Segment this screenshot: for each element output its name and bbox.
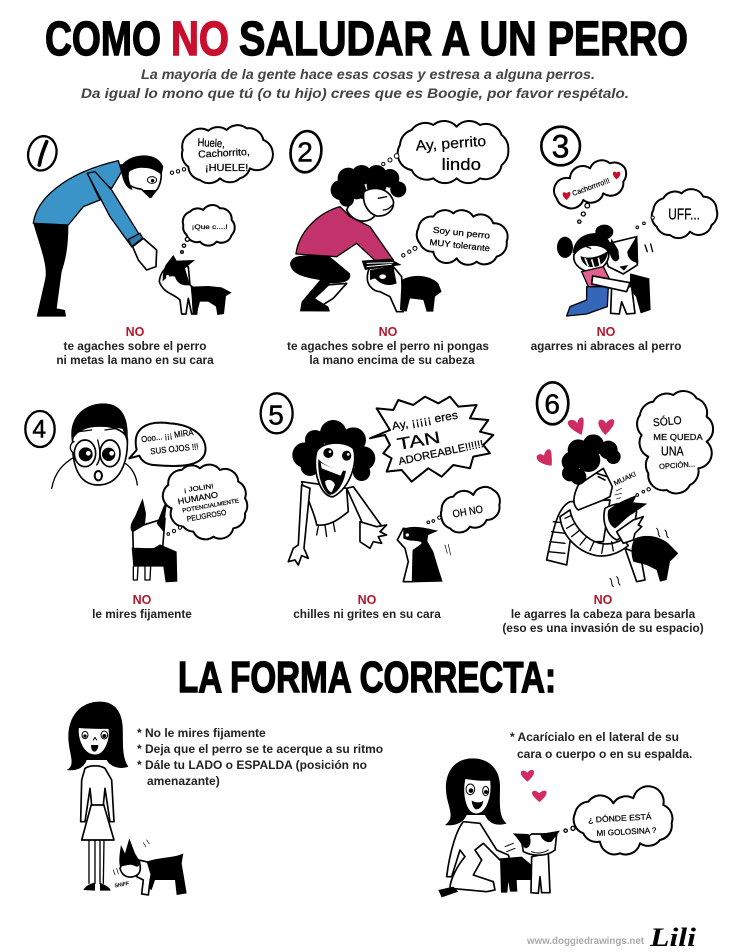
dog's thought cloud <box>402 210 508 265</box>
dog's thought cloud: ¡ JOLIN! <box>183 483 214 494</box>
kneeling woman <box>438 758 510 897</box>
dog's UFF cloud <box>636 189 717 252</box>
dog's thought cloud: ME QUEDA <box>653 432 703 442</box>
number 4 <box>25 411 55 447</box>
woman's thought cloud <box>382 121 508 183</box>
caption 4: NO <box>133 593 152 607</box>
dog's OH NO cloud: OH NO <box>452 503 484 521</box>
list: second tip: * Acarícialo en el lateral de su <box>510 730 679 744</box>
caption 3 <box>531 325 681 353</box>
dog's thought cloud: MI GOLOSINA ? <box>596 826 657 838</box>
number 4: 4 <box>32 417 46 444</box>
caption 1: te agaches sobre el perro <box>64 339 206 353</box>
dog's thought cloud: SÓLO <box>652 414 682 429</box>
panel: 2 hand on the head <box>288 121 508 312</box>
list: first tips: * Deja que el perro se te acerque a su ritmo <box>137 742 383 756</box>
caption 2: la mano encima de su cabeza <box>309 353 475 367</box>
dog being petted <box>500 831 560 893</box>
caption 4 <box>92 593 192 621</box>
number 6: 6 <box>544 388 560 419</box>
caption 2: te agaches sobre el perro ni pongas <box>287 339 489 353</box>
dog's UFF cloud: UFF... <box>668 206 700 223</box>
caption 2: NO <box>379 325 398 339</box>
shouting woman <box>288 420 383 565</box>
caption 1: ni metas la mano en su cara <box>56 353 214 367</box>
subtitle: Da igual lo mono que tú (o tu hijo) crees que es Boogie, por favor respétalo. <box>81 86 629 101</box>
caption 1 <box>56 325 214 367</box>
dog's thought cloud <box>163 465 247 539</box>
list: first tips: * No le mires fijamente <box>137 726 266 740</box>
man's thought cloud: ¡HUELE! <box>205 163 248 174</box>
standing woman <box>67 702 128 891</box>
sniffing dog <box>113 838 187 895</box>
number 5 <box>261 393 293 433</box>
dog's thought cloud <box>181 205 235 253</box>
list: first tips: * Dále tu LADO o ESPALDA (posición no <box>137 758 367 772</box>
caption 2 <box>287 325 489 367</box>
subtitle <box>81 67 629 101</box>
title <box>45 13 688 66</box>
staring man <box>52 403 137 488</box>
panel: 1 leaning over the dog <box>24 125 273 317</box>
caption 4: le mires fijamente <box>92 607 192 621</box>
number 6 <box>537 382 568 424</box>
caption 6: NO <box>594 593 613 607</box>
number 2 <box>288 129 324 174</box>
man <box>33 155 163 317</box>
woman's shout bubble: Ay, ¡¡¡¡¡ eres <box>391 409 459 433</box>
kissing woman: MUAK! <box>613 471 638 487</box>
dog's thought cloud: PELIGROSO <box>186 508 227 524</box>
caption 6 <box>502 593 704 635</box>
panel: 3 hugging <box>541 127 717 316</box>
sitting dog <box>397 527 451 582</box>
sniffing dog: SNIFF <box>114 881 130 889</box>
caption 1: NO <box>126 325 145 339</box>
man's thought cloud: Cachorrito, <box>198 147 250 161</box>
dog's thought cloud <box>636 391 713 496</box>
dog's thought cloud: POTENCIALMENTE <box>182 498 240 514</box>
woman's thought cloud: lindo <box>442 155 481 174</box>
caption 3: NO <box>597 325 616 339</box>
dog's thought cloud: OPCIÓN... <box>659 459 695 471</box>
dog being kissed <box>604 495 678 587</box>
man's thought cloud <box>170 125 273 183</box>
caption 6: (eso es una invasión de su espacio) <box>502 621 704 635</box>
panel: correct way, standing woman and dog <box>67 702 187 895</box>
number 5: 5 <box>268 399 284 430</box>
list: first tips: amenazante) <box>147 774 220 788</box>
caption 3: agarres ni abraces al perro <box>531 339 681 353</box>
subtitle: La mayoría de la gente hace esas cosas y estresa a alguna perros. <box>141 67 595 82</box>
caption 5: NO <box>358 593 377 607</box>
list: second tip <box>510 730 692 761</box>
number 3: 3 <box>552 129 569 165</box>
list: second tip: cara o cuerpo o en su espalda. <box>517 747 692 761</box>
caption 6: le agarres la cabeza para besarla <box>511 607 696 621</box>
panel: 6 kissing <box>537 382 713 587</box>
dog hugged <box>605 235 651 314</box>
man's speech bubble <box>129 423 206 466</box>
hearts <box>521 770 547 802</box>
website credit: www.doggiedrawings.net <box>526 936 645 947</box>
dog 2 with hand on head <box>362 259 442 312</box>
woman's shout bubble: ADOREABLE!!!!!! <box>397 438 485 468</box>
dog seen from behind <box>131 498 177 582</box>
dog's thought cloud: MUY tolerante <box>429 237 491 253</box>
list: first tips <box>137 726 383 788</box>
girl <box>557 225 630 316</box>
dog's thought cloud: Soy un perro <box>432 225 491 241</box>
hearts <box>537 417 614 466</box>
title: NO <box>171 13 229 66</box>
dog's thought cloud: HUMANO <box>177 489 219 506</box>
caption 5 <box>293 593 441 621</box>
signature: Lili <box>649 923 697 952</box>
heading: la forma correcta: LA FORMA CORRECTA: <box>178 653 556 702</box>
panel: 4 staring <box>25 403 247 582</box>
girl's thought cloud <box>554 160 626 223</box>
woman <box>290 165 406 311</box>
number 1 <box>24 133 60 174</box>
man's speech bubble: SUS OJOS !!! <box>150 441 199 456</box>
man's thought cloud: Huele, <box>197 137 225 150</box>
dog 1 <box>159 255 232 315</box>
woman's shout bubble: TAN <box>396 428 442 454</box>
panel: correct way, kneeling woman and dog <box>438 758 672 897</box>
dog's thought cloud <box>564 786 672 854</box>
panel: 5 shouting <box>261 393 500 582</box>
man's speech bubble: Ooo... ¡¡¡ MIRA <box>141 427 194 444</box>
caption 5: chilles ni grites en su cara <box>293 607 441 621</box>
woman's right hand <box>360 522 387 548</box>
title: COMO <box>45 13 161 66</box>
number 2: 2 <box>297 137 313 168</box>
dog's thought cloud: ¡Que c....! <box>192 224 228 231</box>
kissing woman <box>547 434 638 565</box>
dog's OH NO cloud <box>427 487 500 532</box>
number 3 <box>541 127 580 165</box>
dog's thought cloud: ¿ DÓNDE ESTÁ <box>588 812 652 825</box>
woman's thought cloud: Ay, perrito <box>415 134 487 155</box>
girl's thought cloud: Cachorrrro!!! <box>571 176 611 198</box>
dog's thought cloud: UNA <box>661 445 684 459</box>
woman's shout bubble <box>370 397 493 482</box>
